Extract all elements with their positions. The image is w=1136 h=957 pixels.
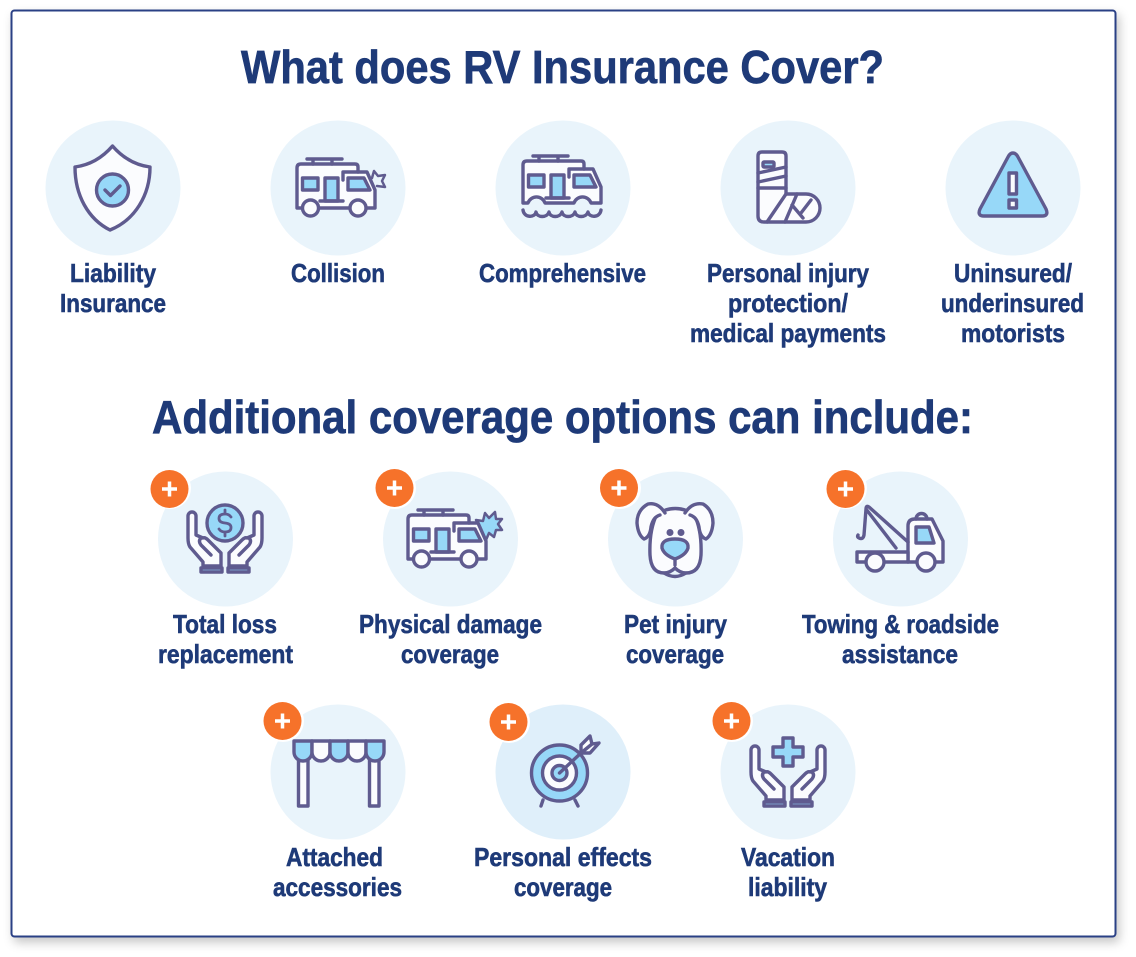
icon: warning triangle (979, 153, 1047, 216)
label: motorists (961, 318, 1065, 348)
label: protection/ (728, 288, 848, 318)
item: Vacation liability (711, 700, 856, 902)
icon: awning (294, 741, 384, 806)
label (941, 258, 1084, 348)
label (474, 842, 652, 902)
icon: target (532, 736, 599, 806)
item: Total loss replacement (149, 467, 293, 669)
label (624, 609, 727, 669)
icon: hands with coin (188, 505, 262, 572)
label (741, 842, 835, 902)
item: Liability Insurance (46, 120, 180, 318)
label: Comprehensive (479, 258, 646, 288)
icon: leg cast (758, 152, 820, 222)
item: Towing (802, 467, 999, 669)
badge: plus (599, 467, 641, 509)
title: What does RV Insurance Cover? (241, 41, 884, 93)
label (273, 842, 402, 902)
label: Pet injury (624, 609, 727, 639)
label: accessories (273, 872, 402, 902)
label: replacement (158, 639, 293, 669)
label: underinsured (941, 288, 1084, 318)
badge: plus (262, 700, 304, 742)
label: Attached (286, 842, 383, 872)
icon: RV collision (297, 159, 385, 216)
item: Collision (270, 120, 406, 288)
badge: plus (711, 700, 753, 742)
label (60, 258, 166, 318)
icon: shield (75, 146, 150, 230)
heading: additional coverage: Additional coverage options can include: (152, 391, 973, 443)
item: Pet injury (599, 467, 743, 669)
badge: plus (374, 467, 416, 509)
icon: RV damage (408, 510, 502, 567)
label: Vacation (741, 842, 835, 872)
label: Insurance (60, 288, 166, 318)
label: Personal injury (707, 258, 869, 288)
item: Personal effects (474, 701, 652, 902)
icon: RV in flood (523, 156, 601, 216)
label: Uninsured/ (954, 258, 1072, 288)
label: coverage (401, 639, 499, 669)
icon: hands with medical cross (751, 738, 825, 806)
badge: plus (825, 467, 867, 509)
label: Liability (70, 258, 156, 288)
label (359, 609, 542, 669)
label: Collision (291, 258, 385, 288)
icon: tow truck (857, 506, 943, 571)
label: assistance (842, 639, 958, 669)
label: coverage (626, 639, 724, 669)
label: Towing & roadside (802, 609, 999, 639)
label: liability (748, 872, 827, 902)
label (690, 258, 886, 348)
item: Personal injury (690, 120, 886, 348)
badge: plus (488, 701, 530, 743)
item: Uninsured (941, 120, 1084, 348)
label: Physical damage (359, 609, 542, 639)
item: Physical damage (359, 467, 542, 669)
badge: plus (149, 467, 191, 509)
item: Attached accessories (262, 700, 406, 902)
label: medical payments (690, 318, 886, 348)
label: Personal effects (474, 842, 652, 872)
item: Comprehensive (479, 120, 646, 288)
label: Total loss (173, 609, 277, 639)
icon: dog (637, 504, 713, 576)
label: coverage (514, 872, 612, 902)
label (802, 609, 999, 669)
label (158, 609, 293, 669)
